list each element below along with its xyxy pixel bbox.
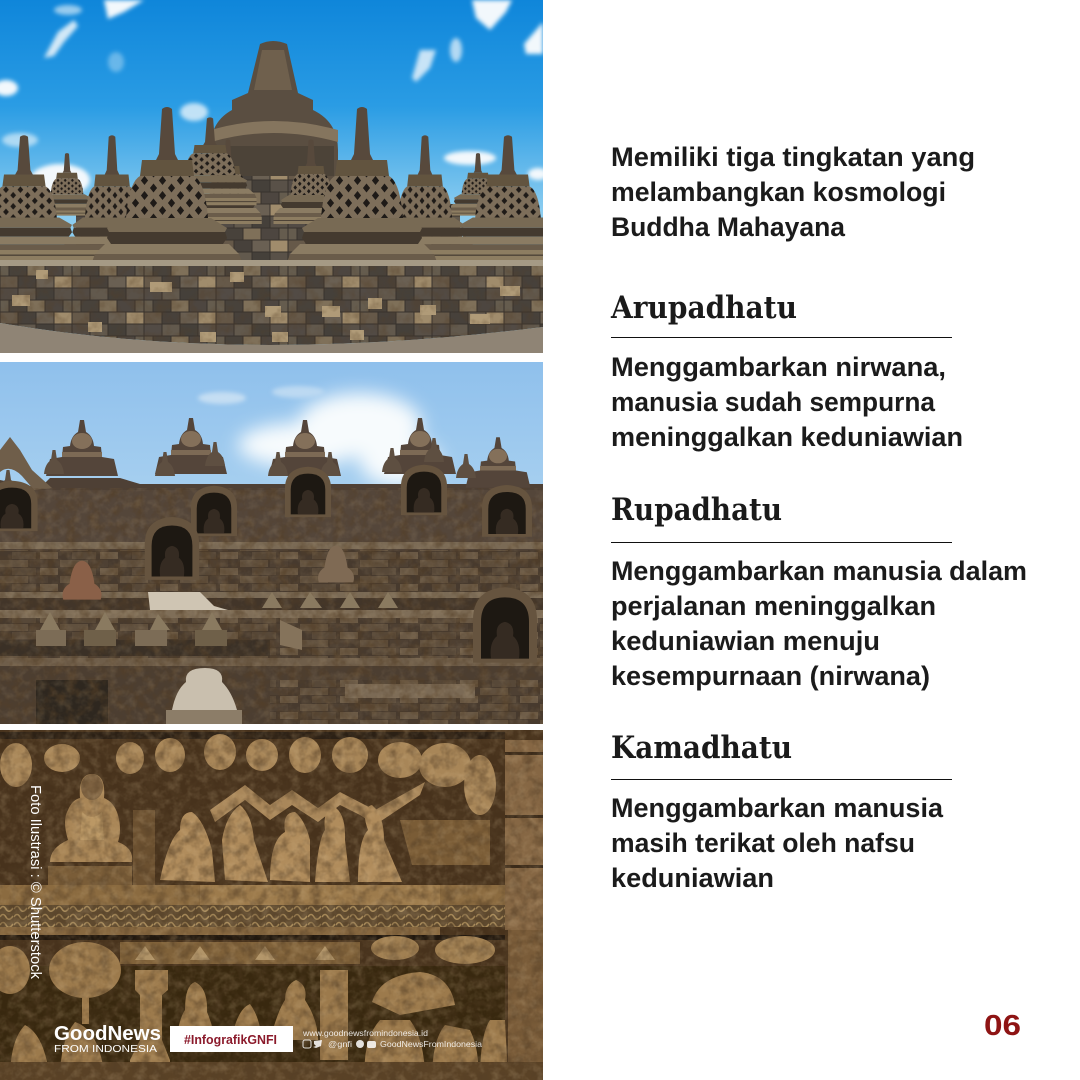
group of relief figures [160,805,402,882]
text: Kamadhatu description: Menggambarkan manusia [611,793,944,823]
intro text: melambangkan kosmologi [611,177,946,207]
right stone column [505,740,543,930]
text: Rupadhatu description: keduniawian menuju [611,626,880,656]
heading: Arupadhatu: Arupadhatu [610,290,797,326]
logo: GoodNews from Indonesia: GoodNews [54,1022,161,1045]
seated Buddha relief [50,774,132,862]
upper plain ledge [0,885,505,905]
social links: www.goodnewsfromindonesia.id [302,1028,428,1038]
stone mottling [0,730,543,1080]
intro text: Buddha Mahayana [611,212,846,242]
hashtag badge: #InfografikGNFI [184,1033,277,1047]
page number: 06 [984,1010,1021,1042]
heading: Kamadhatu: Kamadhatu [611,730,792,766]
intro text: Memiliki tiga tingkatan yang [611,142,975,172]
text: Rupadhatu description [611,556,1027,691]
text: Rupadhatu description: Menggambarkan manusia dalam [611,556,1027,586]
headless white Buddha [172,668,237,710]
clouds in the blue sky [0,0,548,196]
social links: GoodNewsFromIndonesia [380,1039,482,1049]
small triangular gables [40,592,398,630]
text: Rupadhatu description: kesempurnaan (nirwana) [611,661,930,691]
text: Arupadhatu description [611,352,963,452]
text: Kamadhatu description [611,793,944,893]
hashtag badge [170,1026,293,1052]
photo: Kamadhatu relief panels [0,730,543,1080]
text: Kamadhatu description: keduniawian [611,863,774,893]
text: Arupadhatu description: meninggalkan keduniawian [611,422,963,452]
stone terraces [0,490,543,542]
logo: GoodNews from Indonesia [54,1022,161,1055]
text: Rupadhatu description: perjalanan meninggalkan [611,591,936,621]
background stupas [50,153,88,216]
niches with Buddha statues [285,467,331,517]
carved frieze band [0,905,505,927]
heading: Rupadhatu: Rupadhatu [611,492,782,528]
curved brick wall [0,262,543,345]
soft white clouds [238,393,440,486]
foreground stupas [0,135,84,260]
photo credit: Foto Ilustrasi : © Shutterstock [27,785,43,980]
text: Kamadhatu description: masih terikat oleh nafsu [611,828,915,858]
text: Arupadhatu description: manusia sudah sempurna [611,387,936,417]
chevron roofs [210,782,425,825]
light bricks in wall [12,270,520,342]
social links [302,1028,482,1049]
top relief with trees [0,732,505,739]
text: Arupadhatu description: Menggambarkan nirwana, [611,352,946,382]
lower relief [0,966,505,1062]
logo: GoodNews from Indonesia: FROM INDONESIA [54,1043,157,1055]
lower plain ledge [0,927,440,935]
texture over masonry [0,488,543,724]
social links: @gnfi [328,1039,352,1049]
intro text [611,142,975,242]
stone floor [0,323,543,353]
pale new masonry [148,592,228,610]
photo: Rupadhatu terraces [0,362,543,724]
photo: Arupadhatu stupas [0,0,568,353]
central stupa [210,41,338,182]
seated Buddha statues [318,546,354,582]
temple mass [0,478,543,550]
ornamental band [120,942,360,964]
